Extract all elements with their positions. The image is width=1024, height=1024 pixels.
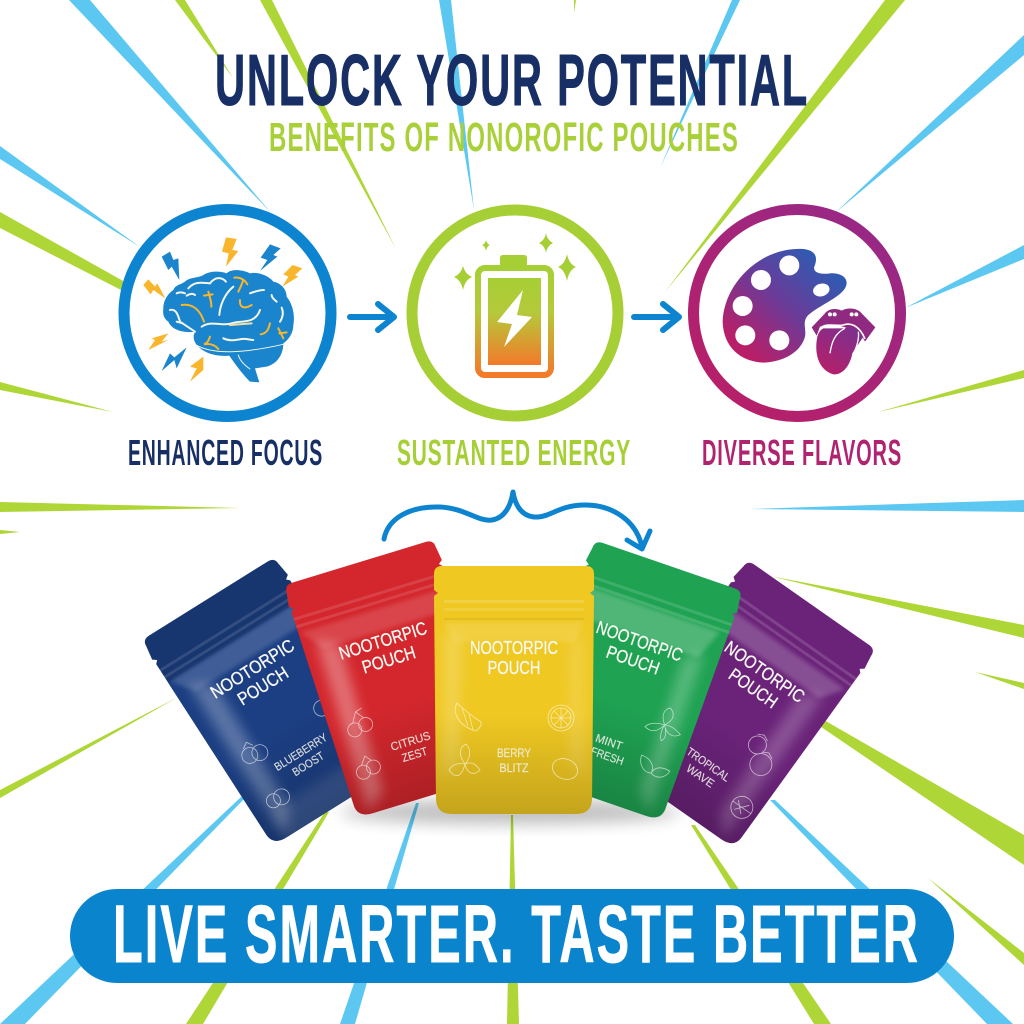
pouch: tropical wave	[668, 562, 873, 844]
icons: cherries	[339, 706, 388, 781]
pouch label: POUCH	[604, 642, 662, 679]
icons: blueberries	[234, 695, 361, 812]
pouch label: POUCH	[488, 658, 540, 678]
panel: diverse flavors icon	[694, 210, 900, 416]
flavor name: WAVE	[684, 763, 716, 791]
icon: battery	[478, 255, 551, 375]
pouch label: POUCH	[725, 664, 781, 712]
flavor name: BLITZ	[500, 763, 528, 775]
flavor name: ZEST	[401, 746, 429, 765]
icon: lips and tongue	[812, 309, 875, 374]
icons: berries	[709, 730, 792, 823]
label: enhanced focus: ENHANCED FOCUS	[128, 432, 323, 473]
flavor name: CITRUS	[389, 730, 432, 754]
arrow: focus to energy	[350, 304, 394, 330]
pouch: blueberry boost	[144, 560, 351, 841]
flavor name: BLUEBERRY	[273, 732, 330, 774]
icons: mint leaves	[631, 702, 689, 780]
pouch label: NOOTORPIC	[207, 635, 298, 703]
pouch: mint refresh	[586, 542, 740, 818]
pouch label: POUCH	[234, 663, 292, 709]
icons: citrus and mint	[449, 703, 581, 783]
pouch label: NOOTORPIC	[470, 638, 558, 658]
flavor name: MINT	[594, 733, 624, 753]
curly arrow over pouches	[384, 492, 650, 549]
pouch label: NOOTORPIC	[336, 618, 429, 664]
label: sustained energy: SUSTANTED ENERGY	[397, 432, 631, 473]
panel: sustained energy icon	[412, 210, 618, 416]
pouch label: NOOTORPIC	[594, 617, 685, 665]
flavor name: BERRY	[497, 748, 531, 760]
flavor name: TROPICAL	[684, 746, 732, 785]
banner	[70, 889, 954, 983]
flavor name: BOOST	[291, 750, 327, 779]
icon: palette	[723, 249, 847, 363]
pouch: berry blitz	[434, 566, 594, 814]
pouch label: POUCH	[360, 642, 418, 677]
pouch: citrus zest	[286, 541, 442, 814]
icon: lightning bolts	[143, 237, 302, 382]
pouch shadow	[340, 800, 680, 824]
flavor name: REFRESH	[576, 741, 625, 768]
pouch label: NOOTORPIC	[721, 637, 808, 707]
icon: brain	[163, 270, 294, 382]
arrow: energy to flavors	[634, 304, 679, 330]
icon: sparkles	[454, 233, 576, 290]
panel: enhanced focus icon	[124, 210, 331, 416]
